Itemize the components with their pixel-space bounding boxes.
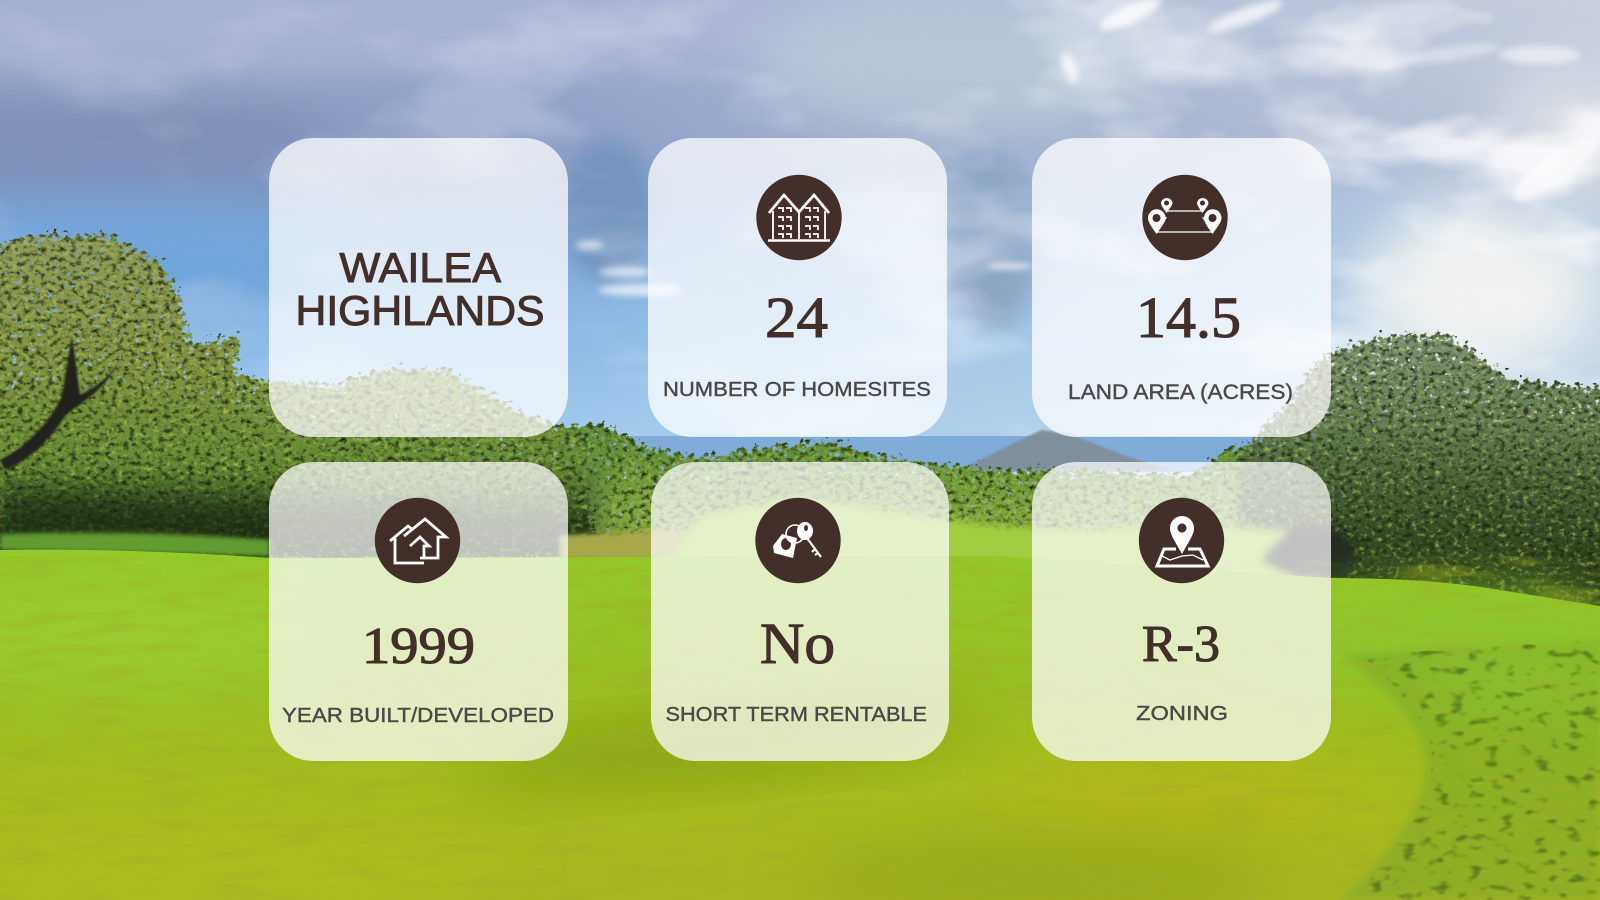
card: short term rentable bbox=[651, 462, 949, 761]
card panel bbox=[648, 138, 947, 437]
sky bbox=[0, 0, 1600, 480]
card panel bbox=[269, 138, 568, 437]
title text: HIGHLANDS bbox=[296, 287, 544, 334]
card panel bbox=[1032, 138, 1331, 437]
icon: houses bbox=[375, 498, 460, 583]
bush bbox=[1265, 525, 1355, 585]
trees left bbox=[0, 236, 600, 560]
card: title bbox=[269, 138, 568, 437]
tree body left bbox=[0, 380, 600, 560]
distant fairway bbox=[670, 498, 1300, 600]
title text bbox=[296, 244, 544, 334]
value: 1999 bbox=[362, 618, 475, 675]
trees right bbox=[1240, 335, 1600, 620]
rough texture right bbox=[1367, 642, 1600, 900]
card: land area bbox=[1032, 138, 1331, 437]
trunk left bbox=[0, 335, 120, 470]
label: ZONING bbox=[1136, 702, 1228, 725]
pale hedge strip centre bbox=[560, 530, 690, 560]
label: LAND AREA (ACRES) bbox=[1068, 381, 1293, 404]
icon: land pins bbox=[1142, 175, 1228, 260]
hedge strip left bbox=[0, 533, 270, 556]
white cloud flecks bbox=[576, 0, 1600, 296]
card panel bbox=[269, 462, 568, 761]
grass bbox=[0, 550, 1600, 900]
value: 14.5 bbox=[1136, 285, 1241, 350]
sea bbox=[560, 436, 1280, 472]
label: NUMBER OF HOMESITES bbox=[663, 378, 931, 401]
icon: buildings bbox=[756, 175, 842, 260]
value: 24 bbox=[765, 285, 828, 350]
label: YEAR BUILT/DEVELOPED bbox=[282, 704, 554, 727]
card: zoning bbox=[1032, 462, 1331, 761]
understory shadow left bbox=[0, 490, 590, 552]
icon: map pin bbox=[1139, 498, 1224, 583]
card: number of homesites bbox=[648, 138, 947, 437]
value: R-3 bbox=[1142, 616, 1220, 673]
card panel bbox=[1032, 462, 1331, 761]
card: year built bbox=[269, 462, 568, 761]
label: SHORT TERM RENTABLE bbox=[666, 703, 927, 726]
value: No bbox=[760, 611, 835, 676]
card panel bbox=[651, 462, 949, 761]
icon: house keys bbox=[755, 498, 841, 583]
mountain bbox=[960, 430, 1170, 470]
distant trees bbox=[540, 424, 1290, 570]
tree body right bbox=[1250, 420, 1600, 620]
title text: WAILEA bbox=[340, 244, 501, 291]
